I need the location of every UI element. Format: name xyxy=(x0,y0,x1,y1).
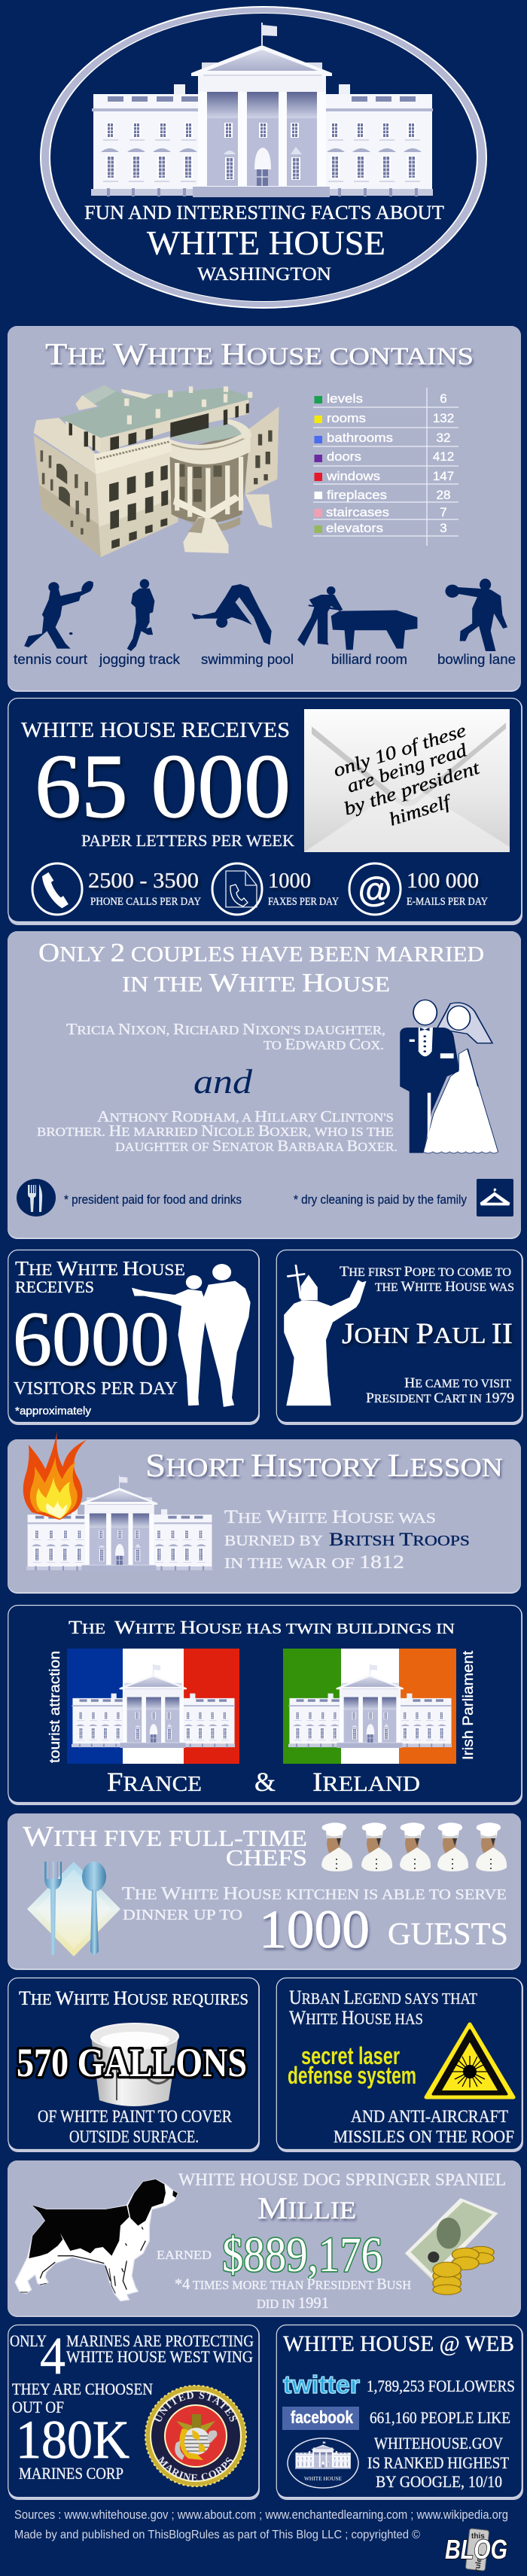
table row: doors: doors xyxy=(327,449,361,464)
icon: money and coins xyxy=(405,2198,498,2294)
White House illustration xyxy=(26,1475,213,1571)
text xyxy=(334,2107,514,2146)
title line 1: FUN AND INTERESTING FACTS ABOUT xyxy=(84,202,444,224)
label: swimming pool: swimming pool xyxy=(201,652,294,667)
label: tennis court: tennis court xyxy=(14,652,87,667)
panel: marines xyxy=(8,2325,260,2500)
text: BRITSH TROOPS xyxy=(329,1530,470,1550)
footer: credit: Made by and published on ThisBlogRules as part of This Blog LLC ; copyrighted © xyxy=(14,2529,420,2541)
panel: letters received xyxy=(8,699,522,925)
heading: IN THE WHITE HOUSE xyxy=(122,968,390,997)
White House logo xyxy=(288,2438,358,2488)
text: only 4 marines: MARINES ARE PROTECTING xyxy=(66,2331,254,2350)
text: second couple xyxy=(37,1109,398,1155)
text: visit: PRESIDENT CART IN 1979 xyxy=(366,1390,514,1406)
silhouette: pope xyxy=(284,1265,367,1405)
label: France: FRANCE xyxy=(107,1767,202,1797)
panel: twin buildings xyxy=(8,1605,522,1805)
flag: Ireland xyxy=(283,1649,456,1764)
text: first pope xyxy=(340,1264,514,1295)
text: visit xyxy=(366,1375,514,1406)
text: IN THE WAR OF 1812 xyxy=(224,1552,404,1573)
footnote: *approximately xyxy=(15,1405,92,1417)
oval ring xyxy=(40,6,487,309)
text: guests: GUESTS xyxy=(388,1917,508,1952)
seal text: UNITED STATES xyxy=(154,2392,236,2422)
text: laser system xyxy=(288,2042,416,2089)
text xyxy=(224,1507,470,1573)
heading: THE WHITE HOUSE CONTAINS xyxy=(45,336,474,371)
logo: This Blog Rules xyxy=(445,2529,507,2572)
text: OUTSIDE SURFACE. xyxy=(69,2127,199,2146)
heading xyxy=(23,1821,307,1871)
envelope with note xyxy=(304,709,510,852)
big number: 180K xyxy=(16,2410,129,2470)
stat: phone calls: 2500 - 3500 xyxy=(88,869,199,893)
label: bowling lane: bowling lane xyxy=(437,652,516,667)
table row: windows: windows xyxy=(326,469,380,483)
table row: windows: 147 xyxy=(433,469,454,483)
label: billiard room: billiard room xyxy=(331,652,407,667)
text: ranking: WHITEHOUSE.GOV xyxy=(374,2434,503,2453)
table row: bathrooms: bathrooms xyxy=(327,431,393,445)
footnote: DID IN 1991 xyxy=(257,2295,329,2312)
text xyxy=(38,2107,233,2146)
icon: tennis player xyxy=(24,580,96,649)
icon: phone xyxy=(32,863,82,915)
text: MISSILES ON THE ROOF xyxy=(334,2127,514,2146)
heading: THE WHITE HOUSE REQUIRES xyxy=(19,1987,248,2009)
label: ampersand: & xyxy=(254,1767,276,1797)
text: second couple: DAUGHTER OF SENATOR BARBARA BOXER. xyxy=(115,1138,398,1155)
header: seal with White House xyxy=(40,6,487,309)
text: OF WHITE PAINT TO COVER xyxy=(38,2107,233,2126)
text: ranking: IS RANKED HIGHEST xyxy=(367,2453,509,2472)
label: jogging track: jogging track xyxy=(99,652,181,667)
heading: WHITE HOUSE @ WEB xyxy=(283,2331,514,2356)
table row: fireplaces: 28 xyxy=(437,488,450,502)
text: ranking xyxy=(367,2434,509,2491)
panel: the White House contains xyxy=(8,326,521,692)
icon: napkin with fork and spoon xyxy=(27,1862,120,1956)
table row: doors: 412 xyxy=(433,449,454,464)
text: second couple: ANTHONY RODHAM, A HILLARY CLINTON'S xyxy=(97,1109,394,1125)
footnote: *4 TIMES MORE THAN PRESIDENT BUSH xyxy=(175,2276,411,2293)
table row: fireplaces xyxy=(315,488,450,502)
facebook logo: facebook xyxy=(291,2407,353,2427)
text: 570 gallons: 570 GALLONS xyxy=(17,2040,247,2085)
text: first couple: TRICIA NIXON, RICHARD NIXON'S DAUGHTER, xyxy=(66,1022,385,1038)
text: chosen: OUT OF xyxy=(12,2398,64,2416)
heading: WHITE HOUSE HAS xyxy=(289,2007,423,2029)
table row: bathrooms xyxy=(315,431,450,445)
icon: five chefs xyxy=(321,1822,507,1871)
big number: 6000 xyxy=(13,1296,169,1382)
data table xyxy=(313,388,458,546)
envelope text: only 10 of these xyxy=(331,720,468,781)
flag: France xyxy=(67,1649,239,1764)
amount: $889,176 xyxy=(222,2227,382,2282)
silhouette: visitors xyxy=(132,1264,251,1407)
text: marines corp: MARINES CORP xyxy=(19,2464,123,2483)
icon: e-mail xyxy=(349,863,401,915)
icon: jogger xyxy=(127,579,154,651)
table row: staircases: 7 xyxy=(440,505,447,519)
footnote xyxy=(175,2276,411,2312)
table row: staircases xyxy=(315,505,447,519)
text: DINNER UP TO xyxy=(123,1908,242,1923)
panel: laser xyxy=(276,1978,523,2152)
heading: RECEIVES xyxy=(15,1277,94,1296)
table row: bathrooms: 32 xyxy=(437,431,450,445)
stat: e-mails: 100 000 xyxy=(407,869,479,893)
text: first couple: TO EDWARD COX. xyxy=(264,1037,384,1053)
stat: e-mails: E-MAILS PER DAY xyxy=(407,896,488,908)
heading: URBAN LEGEND SAYS THAT xyxy=(289,1987,477,2008)
icon: marine corps seal xyxy=(145,2385,247,2487)
table row: levels: 6 xyxy=(440,391,447,406)
twitter logo: twitter xyxy=(283,2370,360,2398)
label: tourist attraction: tourist attraction xyxy=(47,1651,63,1763)
heading: ONLY 2 COUPLES HAVE BEEN MARRIED xyxy=(38,938,484,967)
table row: windows xyxy=(315,469,454,483)
table row: rooms xyxy=(315,411,454,425)
stat: phone calls xyxy=(88,869,201,908)
table row: staircases: staircases xyxy=(326,505,389,519)
panel: Millie the dog xyxy=(8,2160,521,2317)
title line 3: WASHINGTON xyxy=(197,264,331,285)
text: ranking: BY GOOGLE, 10/10 xyxy=(376,2472,502,2491)
stat: faxes xyxy=(268,869,339,908)
icon: e-mail: @ xyxy=(358,869,391,909)
text: THE WHITE HOUSE WAS xyxy=(224,1507,436,1527)
stat: faxes: FAXES PER DAY xyxy=(268,896,339,908)
text: earned: EARNED xyxy=(157,2248,212,2262)
text: AND ANTI-AIRCRAFT xyxy=(351,2107,508,2126)
text: only 4 marines: WHITE HOUSE WEST WING xyxy=(66,2347,253,2366)
text: only 4 marines: 4 xyxy=(40,2327,65,2386)
panel: pope xyxy=(276,1250,523,1425)
3D model of White House xyxy=(34,385,279,557)
heading: THE WHITE HOUSE xyxy=(15,1256,185,1280)
White House illustration xyxy=(91,23,434,197)
envelope text: himself xyxy=(387,791,455,830)
heading: SHORT HISTORY LESSON xyxy=(145,1448,503,1484)
label: Ireland: IRELAND xyxy=(312,1767,420,1797)
text: only 4 marines xyxy=(10,2327,254,2386)
icon: springer spaniel xyxy=(15,2179,178,2301)
heading: THE WHITE HOUSE HAS TWIN BUILDINGS IN xyxy=(69,1616,455,1638)
icon: flames xyxy=(23,1430,87,1520)
icon: bowler xyxy=(445,579,507,651)
text: chosen: THEY ARE CHOOSEN xyxy=(12,2380,153,2398)
text: first pope: THE FIRST POPE TO COME TO xyxy=(340,1264,511,1280)
icon: billiard player and table xyxy=(297,586,417,650)
panel: paint xyxy=(8,1978,260,2152)
stat: phone calls: PHONE CALLS PER DAY xyxy=(90,896,201,908)
text: only 4 marines: ONLY xyxy=(10,2331,47,2350)
table row: rooms: rooms xyxy=(327,411,366,425)
logo: This Blog Rules: BLOG xyxy=(445,2534,507,2565)
icon: fax xyxy=(212,863,262,915)
stat: e-mails xyxy=(407,869,488,908)
text: chosen xyxy=(12,2380,153,2416)
icon: fork and knife xyxy=(17,1179,56,1216)
text: THE WHITE HOUSE KITCHEN IS ABLE TO SERVE xyxy=(122,1883,507,1904)
heading: WHITE HOUSE RECEIVES xyxy=(21,718,290,742)
table row: elevators: elevators xyxy=(326,521,383,535)
envelope text xyxy=(331,720,483,830)
logo: This Blog Rules: rules xyxy=(474,2553,485,2572)
subheading: PAPER LETTERS PER WEEK xyxy=(81,831,294,850)
heading: CHEFS xyxy=(226,1845,307,1871)
envelope text: by the president xyxy=(342,757,483,820)
label: Irish Parliament: Irish Parliament xyxy=(461,1650,477,1760)
note: dry cleaning: * dry cleaning is paid by the family xyxy=(294,1192,467,1207)
logo: This Blog Rules: this xyxy=(471,2532,485,2541)
text: and: and xyxy=(193,1062,253,1101)
White House logo: WHITE HOUSE xyxy=(304,2476,342,2482)
icon: bride and groom xyxy=(400,1000,498,1153)
icon: swimmer diving xyxy=(191,584,272,645)
text: visit: HE CAME TO VISIT xyxy=(404,1375,512,1391)
table row: elevators xyxy=(315,521,447,535)
facebook stat: 661,160 PEOPLE LIKE xyxy=(370,2408,510,2427)
envelope text: are being read xyxy=(345,740,470,797)
text: BURNED BY xyxy=(224,1533,323,1549)
table row: fireplaces: fireplaces xyxy=(327,488,387,502)
panel: White House on the web xyxy=(276,2325,523,2500)
panel: weddings xyxy=(8,931,521,1239)
table row: levels xyxy=(315,391,447,406)
text: first couple xyxy=(66,1022,385,1053)
facebook logo xyxy=(282,2407,359,2430)
big number: 65 000 xyxy=(35,736,291,837)
heading: WHITE HOUSE DOG SPRINGER SPANIEL xyxy=(178,2170,506,2189)
big number: 1000 xyxy=(259,1899,370,1959)
heading xyxy=(15,1256,185,1296)
heading xyxy=(38,938,484,997)
heading: WITH FIVE FULL-TIME xyxy=(23,1821,307,1853)
seal text: MARINE CORPS xyxy=(157,2456,233,2481)
text: laser system: secret laser xyxy=(301,2042,400,2069)
seal emblem xyxy=(175,2414,217,2460)
name: JOHN PAUL II xyxy=(342,1317,513,1350)
text: first pope: THE WHITE HOUSE WAS xyxy=(375,1279,514,1295)
note: food: * president paid for food and drinks xyxy=(64,1192,242,1207)
table row: doors xyxy=(315,449,454,464)
title line 2: WHITE HOUSE xyxy=(147,224,385,262)
stat: faxes: 1000 xyxy=(268,869,311,893)
table row: rooms: 132 xyxy=(433,411,454,425)
icon: laser warning xyxy=(426,2024,513,2097)
text: second couple: BROTHER. HE MARRIED NICOLE BOXER, WHO IS THE xyxy=(37,1123,394,1140)
heading xyxy=(289,1987,477,2029)
icon: hanger xyxy=(477,1179,513,1216)
icon: paint bucket xyxy=(91,2023,178,2106)
panel: visitors xyxy=(8,1250,260,1425)
name: MILLIE xyxy=(257,2191,356,2225)
table row: levels: levels xyxy=(327,391,363,406)
panel: chefs xyxy=(8,1813,521,1970)
table row: elevators: 3 xyxy=(440,521,447,535)
panel: history lesson xyxy=(8,1430,521,1594)
subheading: VISITORS PER DAY xyxy=(14,1379,178,1399)
text: laser system: defense system xyxy=(288,2062,416,2089)
